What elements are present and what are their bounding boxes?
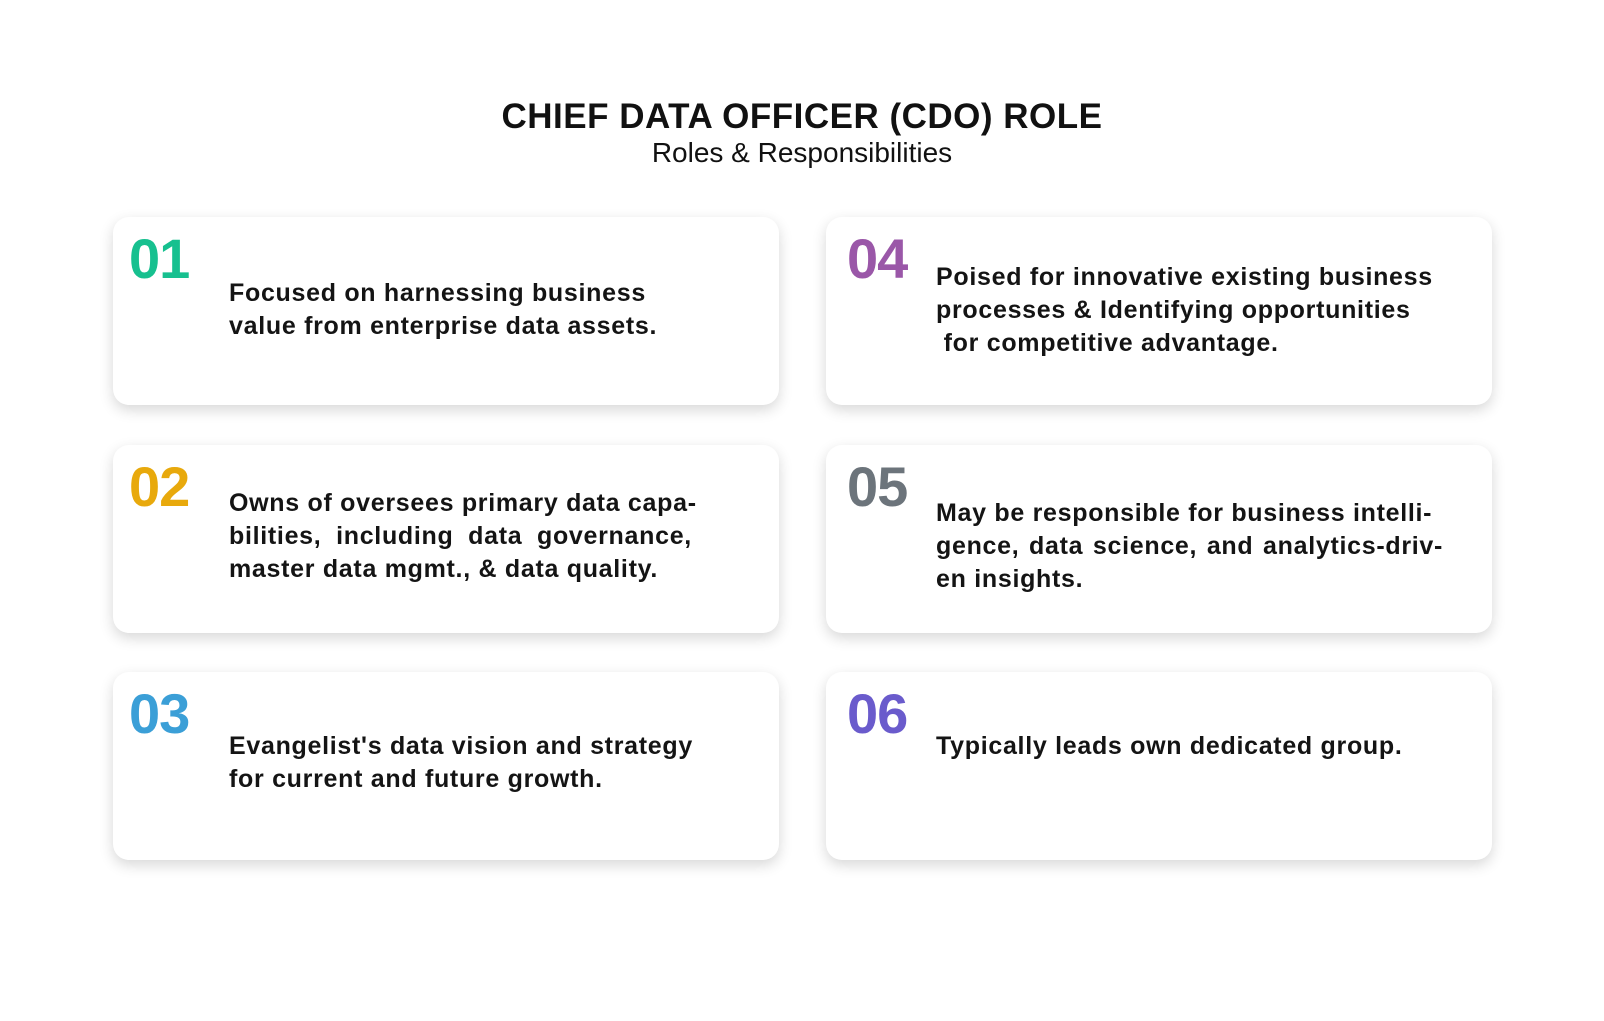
text 02: master data mgmt., & data quality.	[229, 555, 658, 583]
text 04: processes & Identifying opportunities	[936, 296, 1411, 324]
panel: 06	[826, 672, 1492, 860]
text 05: May be responsible for business intelli-	[936, 499, 1432, 527]
text 04: Poised for innovative existing business	[936, 263, 1433, 291]
number 01: 01	[129, 227, 189, 290]
title: CHIEF DATA OFFICER (CDO) ROLE	[501, 97, 1103, 136]
text 04: for competitive advantage.	[944, 329, 1279, 357]
text 01: value from enterprise data assets.	[229, 312, 657, 340]
text 05: gence, data science, and analytics-driv-	[936, 532, 1443, 560]
text 03: for current and future growth.	[229, 765, 603, 793]
text 01	[229, 279, 657, 340]
number 06: 06	[847, 682, 907, 745]
text 03	[229, 732, 693, 793]
text 04	[936, 263, 1433, 357]
subtitle: Roles & Responsibilities	[652, 137, 952, 168]
text 06: Typically leads own dedicated group.	[936, 732, 1402, 760]
text 05	[936, 499, 1443, 593]
text 02: bilities, including data governance,	[229, 522, 692, 550]
text 03: Evangelist's data vision and strategy	[229, 732, 693, 760]
panel: 05	[826, 445, 1492, 633]
number 05: 05	[847, 455, 907, 518]
text 05: en insights.	[936, 565, 1083, 593]
panel: 02	[113, 445, 779, 633]
number 04: 04	[847, 227, 907, 290]
panel: 04	[826, 217, 1492, 405]
text 02	[229, 489, 697, 583]
panel: 03	[113, 672, 779, 860]
text 02: Owns of oversees primary data capa-	[229, 489, 697, 517]
number 03: 03	[129, 682, 189, 745]
number 02: 02	[129, 455, 189, 518]
text 01: Focused on harnessing business	[229, 279, 646, 307]
panel: 01	[113, 217, 779, 405]
